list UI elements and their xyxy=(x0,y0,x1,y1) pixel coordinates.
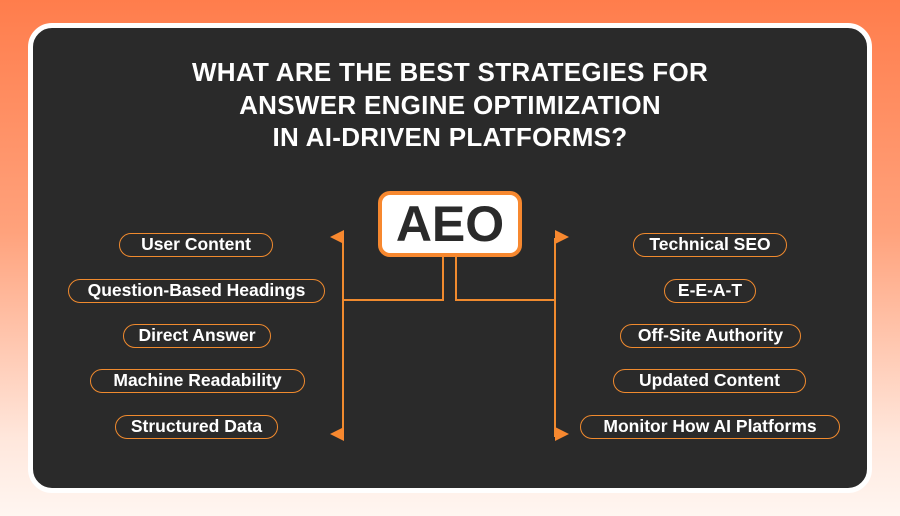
text: Monitor How AI Platforms xyxy=(603,416,817,436)
text: Machine Readability xyxy=(113,370,282,390)
text: Direct Answer xyxy=(138,325,256,345)
text: Question-Based Headings xyxy=(88,280,305,300)
title: WHAT ARE THE BEST STRATEGIES FOR xyxy=(192,57,708,87)
text: User Content xyxy=(141,234,251,254)
AEO central box: AEO xyxy=(396,196,504,252)
left pills xyxy=(68,233,325,439)
text: E-E-A-T xyxy=(678,280,742,300)
title: ANSWER ENGINE OPTIMIZATION xyxy=(239,90,661,120)
text: Structured Data xyxy=(131,416,262,436)
right pills xyxy=(580,233,840,439)
text: Updated Content xyxy=(639,370,780,390)
AEO central box xyxy=(378,191,522,257)
title: IN AI-DRIVEN PLATFORMS? xyxy=(272,122,628,152)
title xyxy=(192,57,708,152)
text: Technical SEO xyxy=(649,234,771,254)
text: Off-Site Authority xyxy=(638,325,783,345)
